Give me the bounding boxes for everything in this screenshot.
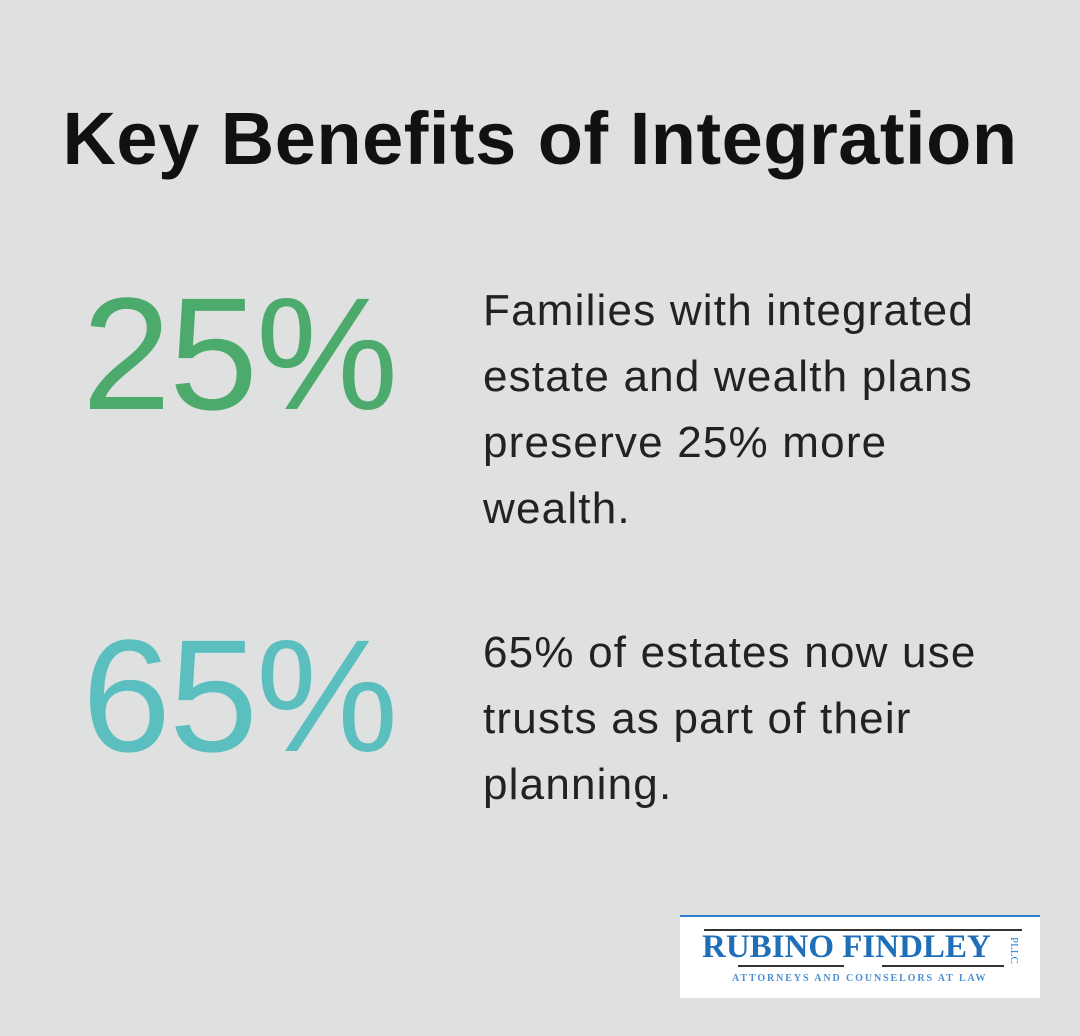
stat: 65%: 65% [82,606,396,785]
logo: PLLC [1008,937,1020,964]
text: 65% description: 65% of estates now use trusts as part of their planning. [483,628,977,809]
logo: ATTORNEYS AND COUNSELORS AT LAW [732,973,987,984]
logo: RUBINO FINDLEY [702,929,991,965]
logo [680,915,1040,998]
stat: 25%: 25% [82,264,396,443]
text: 25% description: Families with integrated estate and wealth plans preserve 25% more wealth. [483,286,974,533]
title: Key Benefits of Integration [62,97,1018,180]
